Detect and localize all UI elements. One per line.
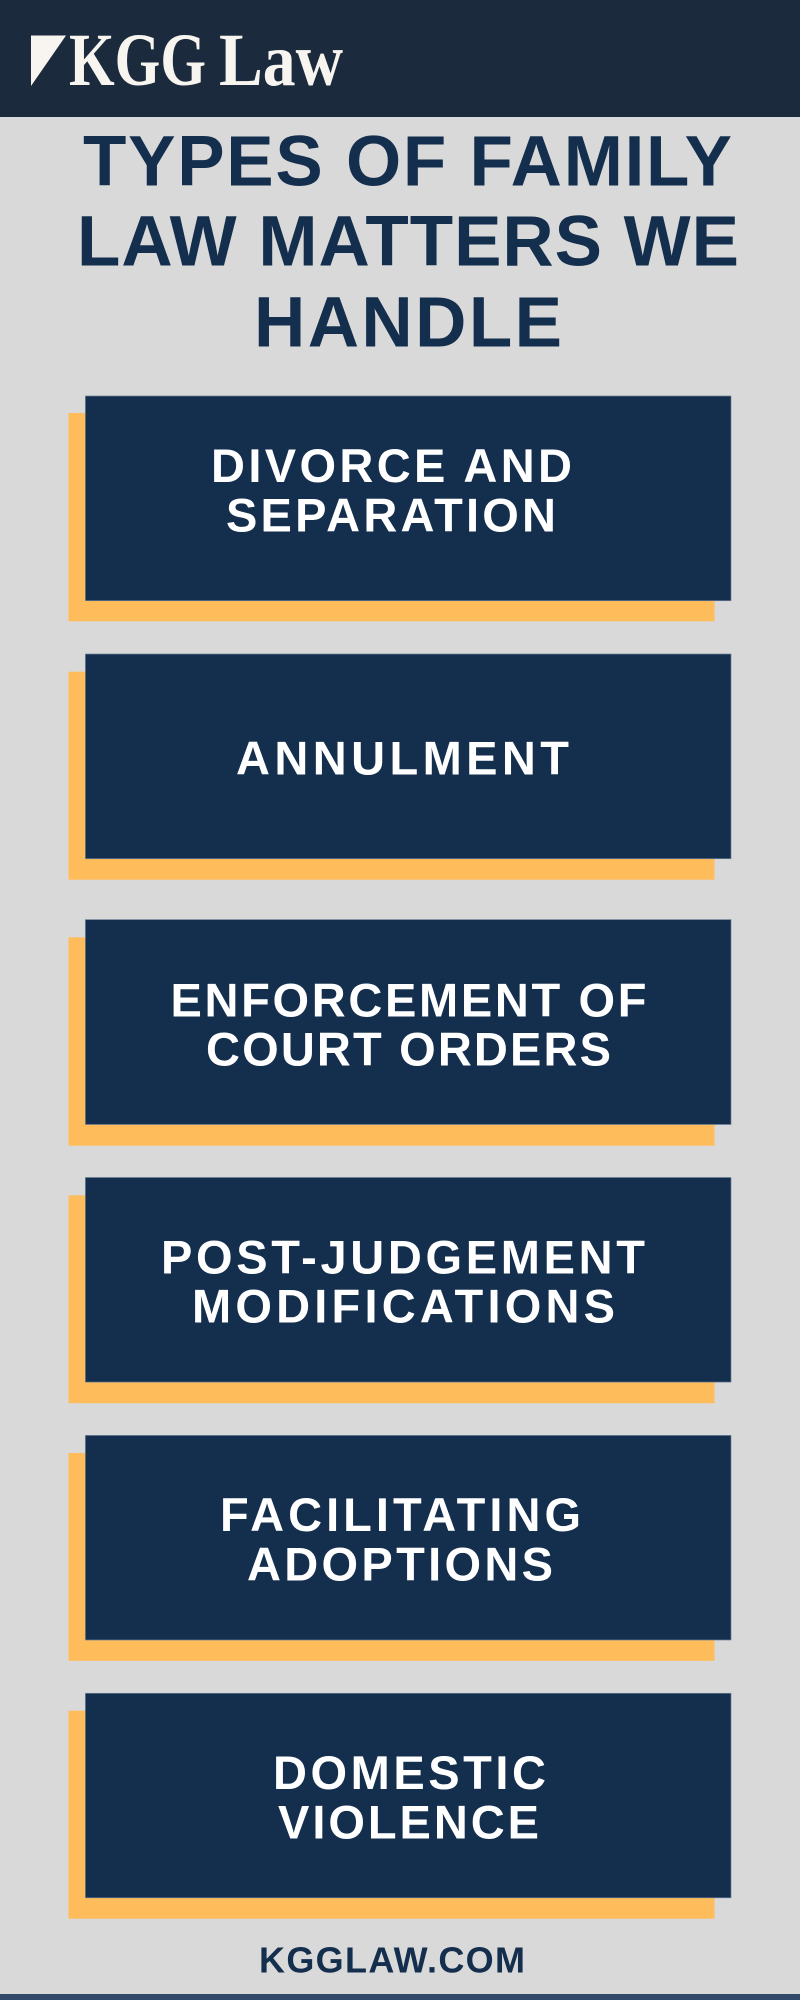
title bbox=[77, 122, 739, 362]
footer website address: KGGLAW.COM bbox=[259, 1940, 525, 1981]
panel: annulment: ANNULMENT bbox=[236, 732, 569, 785]
panel: facilitating adoptions: FACILITATING bbox=[220, 1488, 581, 1541]
panel: facilitating adoptions: ADOPTIONS bbox=[247, 1538, 553, 1591]
logo: KGG Law: KGG bbox=[69, 19, 206, 102]
logo: KGG Law: Law bbox=[219, 19, 343, 102]
panel: post-judgement modifications bbox=[68, 1178, 731, 1403]
bottom bar bbox=[0, 1994, 800, 2000]
panel: domestic violence bbox=[68, 1693, 731, 1919]
panel: enforcement of court orders: ENFORCEMENT OF bbox=[170, 974, 646, 1027]
logo: KGG Law bbox=[31, 19, 343, 102]
panel: divorce and separation: DIVORCE AND bbox=[211, 439, 572, 492]
title: TYPES OF FAMILY bbox=[83, 122, 732, 201]
panel: enforcement of court orders: COURT ORDERS bbox=[206, 1023, 611, 1076]
panel: annulment bbox=[68, 654, 731, 880]
panel: post-judgement modifications: POST-JUDGEMENT bbox=[161, 1231, 645, 1284]
panel: domestic violence: VIOLENCE bbox=[278, 1796, 539, 1849]
panel: divorce and separation bbox=[68, 396, 731, 621]
panel: facilitating adoptions bbox=[68, 1435, 731, 1661]
header band with logo bbox=[0, 0, 800, 117]
panel: divorce and separation: SEPARATION bbox=[226, 489, 556, 542]
panel: post-judgement modifications: MODIFICATIONS bbox=[192, 1280, 615, 1333]
panel: domestic violence: DOMESTIC bbox=[273, 1746, 546, 1799]
title: HANDLE bbox=[254, 283, 562, 362]
panel: enforcement of court orders bbox=[68, 920, 731, 1146]
title: LAW MATTERS WE bbox=[77, 202, 739, 281]
